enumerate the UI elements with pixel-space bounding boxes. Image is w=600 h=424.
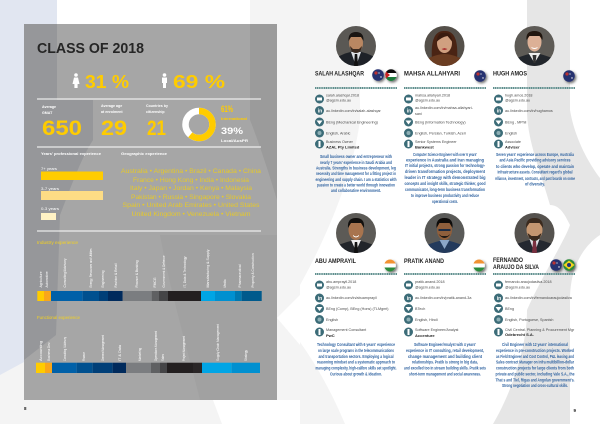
name: SALAH ALASHQAR [315,70,364,78]
bio: engineering and supply chain. I am a statistics with [316,177,397,182]
bio: experience in pre-construction projects. Worked [496,348,574,353]
geographic experience: Geographic experience [121,152,167,156]
contact list: in [318,296,322,302]
bio: construction projects for large clients from both [496,366,574,370]
contact list: hugh.amos.2018 [505,94,532,98]
contact list: au.linkedin.com/in/fernandoaraujodasilva [505,296,573,300]
stacked bar: industry experience: Pharmaceutical [238,264,242,288]
divider [404,87,486,89]
stacked bar: industry experience: Government & Defence [162,255,166,288]
bio [495,152,576,186]
stacked bar: functional experience: Project Management [182,336,186,361]
contact list: @agsm.edu.au [415,98,440,102]
geographic experience: Pakistan • Russia • Singapore • Slovakia [131,194,251,201]
bio [496,342,575,388]
stacked bar: industry experience: FMCG [153,277,157,288]
bio: Computer Science Engineer with over 6 years' [413,152,477,157]
flag: Australia [563,70,575,82]
bio: nearly 7 years' experience in Saudi Arabia and [320,160,392,165]
name: ABU AMPRAYIL [315,258,356,265]
flag: Australia [550,259,562,271]
contact list: in [497,108,501,114]
contact list: English [505,132,517,136]
icon: male [162,73,167,88]
bar chart: professional experience: 0-3 years [41,207,59,211]
stacked bar: industry experience: Consulting/Advisory [63,258,67,288]
contact list: Management Consultant [326,328,366,332]
flag: India [384,260,396,271]
contact list: Software Engineer/Analyst [415,328,458,332]
bio: experience in Australia and Iran managing [406,158,484,163]
profile: Pratik Anand [404,213,487,376]
contact list: in [318,108,322,114]
photo [514,26,554,66]
stacked bar: industry experience: Manufacturing & Supply [206,249,210,288]
contact list: Civil Central. Planning & Procurement Mgr [505,328,575,332]
contact list: BEng (Comp), BEng (Hons) (TLMgmt) [326,307,388,311]
contact list [494,94,553,150]
contact list: BTech [415,307,425,311]
donut legend: Local/AusPR [221,139,248,143]
profile: Hugh Amos [493,26,576,186]
photo [336,26,376,66]
flag: Brazil [563,259,575,271]
bio: and transportation sectors. Employing a logical [318,354,394,359]
stacked bar: industry experience: Industry experience [37,240,78,246]
male share: 69 % [173,71,225,92]
bio: communicator, long-term business transformation [405,187,485,192]
contact list: Business Owner [326,140,354,144]
contact list: au.linkedin.com/in/mahsa-allahyari- [415,106,474,110]
page number right: 9 [574,408,576,413]
stat: age: 29 [101,117,127,140]
contact list: @agsm.edu.au [415,286,440,290]
bio: leader in IT strategy with demonstrated big [404,175,486,180]
geographic experience: Australia • Argentina • Brazil • Canada • China [121,168,261,175]
stat: countries: citizenship [146,110,165,114]
donut legend [221,104,248,143]
contact list: sani [415,112,422,116]
bio: operational costs. [432,199,458,204]
stacked bar: functional experience: Consulting / Advisory [63,337,67,361]
bio: private and public sector, including Vale S.A., the [496,372,575,376]
contact list: au.linkedin.com/in/hughamos [505,109,553,113]
photo [424,213,464,253]
bio [316,154,397,193]
female share: 31 % [85,71,129,92]
contact list: in [497,296,501,302]
stacked bar: functional experience: Strategy [244,350,248,361]
bio [404,152,486,204]
name: MAHSA ALLAHYARI [404,70,460,78]
bio: Curious about growth & ideation. [330,372,382,376]
name: ARAUJO DA SILVA [493,264,539,271]
donut legend: International [221,117,247,121]
contact list: English, Hindi [415,318,438,322]
geographic experience: France • Hong Kong • India • Indonesia [133,177,249,184]
contact list: in [407,296,411,302]
bar chart: professional experience: 7+ years [41,167,57,171]
stacked bar: industry experience: Media [223,279,227,288]
contact list: Accenture [415,333,435,338]
title: CLASS OF 2018 [37,41,144,57]
name [493,257,539,271]
profile: Salah Alashqar [315,26,397,193]
bio: relationships. Pratik is strong in big data, [412,360,478,364]
stacked bar: industry experience: Property & Construction [251,253,255,288]
contact list [404,94,474,150]
contact list: BEng (Mechanical Engineering) [326,120,378,124]
bio: necessity and time management for a fitting project in [316,171,396,176]
bio: and excelled too in stream building skills. Pratik sets [404,366,487,370]
stacked bar: functional experience: Supply Chain Management [216,324,220,361]
contact list: English, Arabic [326,132,351,136]
stacked bar: functional experience: Operations Management [154,331,158,361]
stat: age: at enrolment [101,110,123,114]
stacked bar: industry experience: Energy, Resources and Utilities [89,248,93,288]
stacked bar: functional experience: Sales [161,354,165,361]
stat: GMAT: GMAT [42,111,53,115]
stacked bar: functional experience: General Management [101,335,105,361]
bio: Small business owner and entrepreneur with [320,154,392,159]
stacked bar: industry experience: Finance & Banking [135,260,139,288]
name: FERNANDO [493,257,523,264]
bio: That s and Tiel, Rigas and Angolan government's. [496,378,574,382]
stacked bar: functional experience: Accounting [39,341,43,361]
stacked bar: industry experience: IT, Data & Technology [183,256,187,288]
flag: Palestine [385,69,397,81]
contact list: pratik.anand.2018 [415,280,445,284]
stacked bar: functional experience: Business Dev. [47,342,51,361]
bio: Sales contract Manager on infra multibillion-dollar [496,360,574,364]
stat: countries [146,104,168,140]
bar chart: professional experience: Years' professional experience [41,152,101,156]
bio: to improve business productivity and reduce [411,193,480,198]
contact list [404,280,472,338]
bio: of diversity. [525,182,545,186]
stacked bar: functional experience: Functional experience [37,315,80,321]
bio: concepts and insight skills, strategic thinker, good [404,181,486,186]
icon: female [72,73,80,88]
bio: driven transformation projects, deployment [405,169,486,174]
profile: Fernando Araujo da Silva [493,213,575,388]
contact list: AZAL Pty Limited [326,144,360,150]
geographic experience: Italy • Japan • Jordan • Kenya • Malaysia [130,185,252,192]
photo [336,213,376,253]
stacked bar: industry experience: Automotive [45,271,49,288]
contact list: Bankwest [415,144,434,150]
donut chart [186,111,212,138]
donut legend: 39% [221,126,243,136]
bio: Software Engineer/Analyst with 4 years' [414,342,476,347]
contact list: abu.amprayil.2018 [326,280,356,284]
bio [316,342,396,376]
bio: and Asia Pacific providing advisory services [500,158,571,162]
bio: infrastructure assets. Consultant regard's global [498,170,572,174]
name: HUGH AMOS [493,70,527,78]
contact list: PwC [326,333,335,338]
stacked bar: functional experience: Finance [82,352,86,361]
contact list: au.linkedin.com/in/salah-alashqar [326,109,382,113]
divider [493,87,575,89]
contact list: fernando.araujodasilva.2018 [505,280,552,284]
contact list: English [326,318,338,322]
stacked bar: functional experience: Marketing [138,348,142,361]
contact list: English, Persian, Turkish, Azeri [415,132,466,136]
bio: passion to create a better world through innovation [317,182,395,188]
bar chart: professional experience: 3-7 years [41,187,59,191]
bio: as Field Engineer and Cost Control, P&L leasing and [496,354,574,359]
flag: Australia [372,69,384,81]
contact list: au.linkedin.com/in/pratik-anand-3a [415,296,472,300]
stat: GMAT [42,105,82,140]
bio [404,342,487,376]
contact list: in [407,108,411,114]
donut legend: 61% [221,104,233,114]
bio: experience in IT consulting, retail development, [406,348,484,353]
flag: India [473,260,485,271]
geographic experience: Spain • United Arab Emirates • United States [122,202,260,209]
bio: short-term management and social awareness. [409,372,481,376]
divider [493,273,575,275]
stacked bar: functional experience: IT & Data [118,345,122,361]
stat: countries: Countries by [146,104,168,108]
bio: and collaborative environment. [331,188,381,193]
bio: Australia. Strengths in business development, leg [316,166,396,170]
page number left: 8 [24,406,27,411]
contact list: BEng , MPhil [505,120,526,124]
contact list: Senior Systems Engineer [415,140,457,144]
geographic experience [121,152,261,218]
contact list: au.linkedin.com/in/abuamprayil [326,296,377,300]
photo [424,26,464,66]
stat: age: Average age [101,104,122,108]
contact list [494,280,575,337]
contact list: Associate [505,140,521,144]
geographic experience: United Kingdom • Venezuela • Vietnam [132,211,250,218]
contact list: @agsm.edu.au [326,286,351,290]
stacked bar: industry experience: Fashion & Retail [114,263,118,288]
contact list: @agsm.edu.au [326,98,351,102]
profile: Abu Amprayil [315,213,397,376]
bio: change management and building client [408,354,483,359]
contact list: @agsm.edu.au [505,286,530,290]
contact list: BEng [505,307,514,311]
contact list: mahsa.allahyari.2018 [415,94,450,98]
contact list: salah.alashqar.2018 [326,94,359,98]
bio: Seven years' experience across Europe, Australia [496,152,575,157]
bio: IT initial projects, strong passion for technology- [405,163,486,168]
flag: Australia [474,70,486,82]
contact list [315,280,388,338]
panel: class profile [24,24,277,400]
stacked bar: industry experience: Agriculture [39,271,43,288]
stat: age [101,104,127,140]
contact list: @agsm.edu.au [505,98,530,102]
bio: on large scale programs in the telecommunications [318,348,395,353]
contact list: Odebrecht S.A. [505,332,534,337]
stat: countries: 21 [147,117,166,140]
bio: managing complexity, high-calibre skills set spotlight. [316,366,396,370]
profile: Mahsa Allahyari [404,26,486,204]
bio: Civil Engineer with 12 years' international [502,342,568,347]
bio: Strong negotiation and cross-cultural skills. [502,383,568,388]
bio: Technology Consultant with 6 years' experience [317,342,396,347]
photo [514,213,554,253]
name: PRATIK ANAND [404,258,444,265]
contact list: BEng (Information Technology) [415,120,466,124]
contact list: Adviser [505,144,520,150]
stat: GMAT: 650 [42,117,82,140]
bio: reasoning mindset and a systematic approach to [317,360,395,364]
divider [404,273,486,275]
stacked bar: functional experience [36,315,260,373]
bio: to clients who develop, operate and maintain [496,164,574,169]
stat: GMAT: Average [42,105,56,109]
bar chart: professional experience [41,152,103,220]
divider [315,273,397,275]
divider [315,87,397,89]
contact list [315,94,382,150]
contact list: English, Portuguese, Spanish [505,318,553,322]
stacked bar: industry experience [37,240,262,301]
stacked bar: industry experience: Engineering [101,270,105,288]
